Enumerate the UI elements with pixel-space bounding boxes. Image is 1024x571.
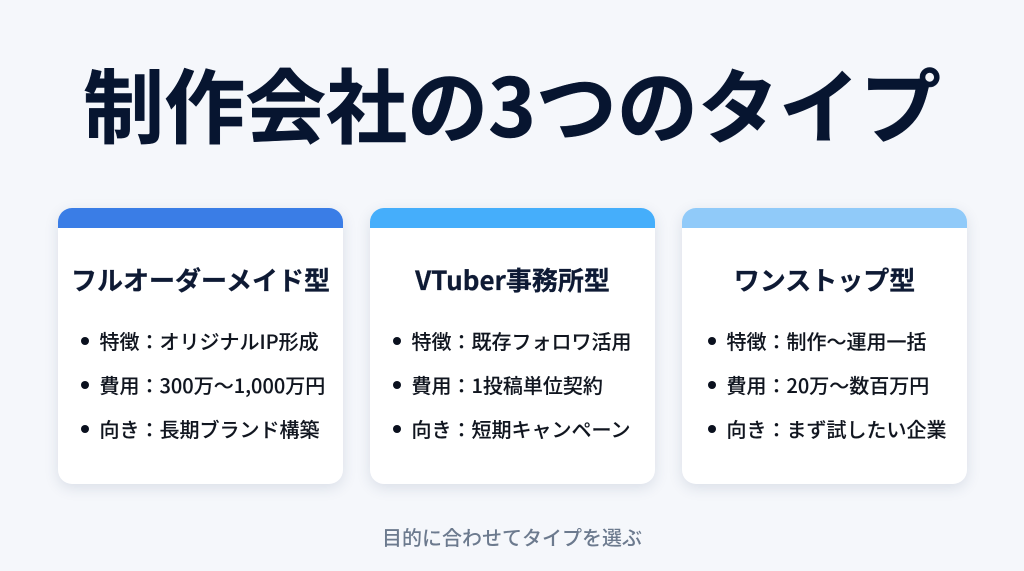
bullet: 向き: 向き：短期キャンペーン [412,414,630,443]
bullet: 特徴: 特徴：既存フォロワ活用 [412,326,632,355]
bullet: 特徴: 特徴：オリジナルIP形成 [100,326,319,355]
bullet: 特徴: 特徴：制作～運用一括 [726,326,926,355]
panel heading: フルオーダーメイド型 [71,261,330,298]
bullet: 費用: 費用：20万～数百万円 [726,370,929,399]
panel: ワンストップ型 [682,208,967,484]
bullet: 費用: 費用：300万～1,000万円 [100,370,325,399]
title: 制作会社の3つのタイプ [83,44,941,161]
panel colour band: light blue [682,208,967,228]
panel colour band: blue [58,208,343,228]
panel heading: ワンストップ型 [734,261,915,298]
bullet: 費用: 費用：1投稿単位契約 [412,370,603,399]
panel heading: VTuber事務所型 [415,261,610,298]
bullet: 向き: 向き：まず試したい企業 [726,414,946,443]
bullet: 向き: 向き：長期ブランド構築 [100,414,320,443]
panel colour band: sky blue [370,208,655,228]
panel: VTuber事務所型 [370,208,655,484]
panel: フルオーダーメイド型 [58,208,343,484]
footer caption: 目的に合わせてタイプを選ぶ [382,522,642,551]
